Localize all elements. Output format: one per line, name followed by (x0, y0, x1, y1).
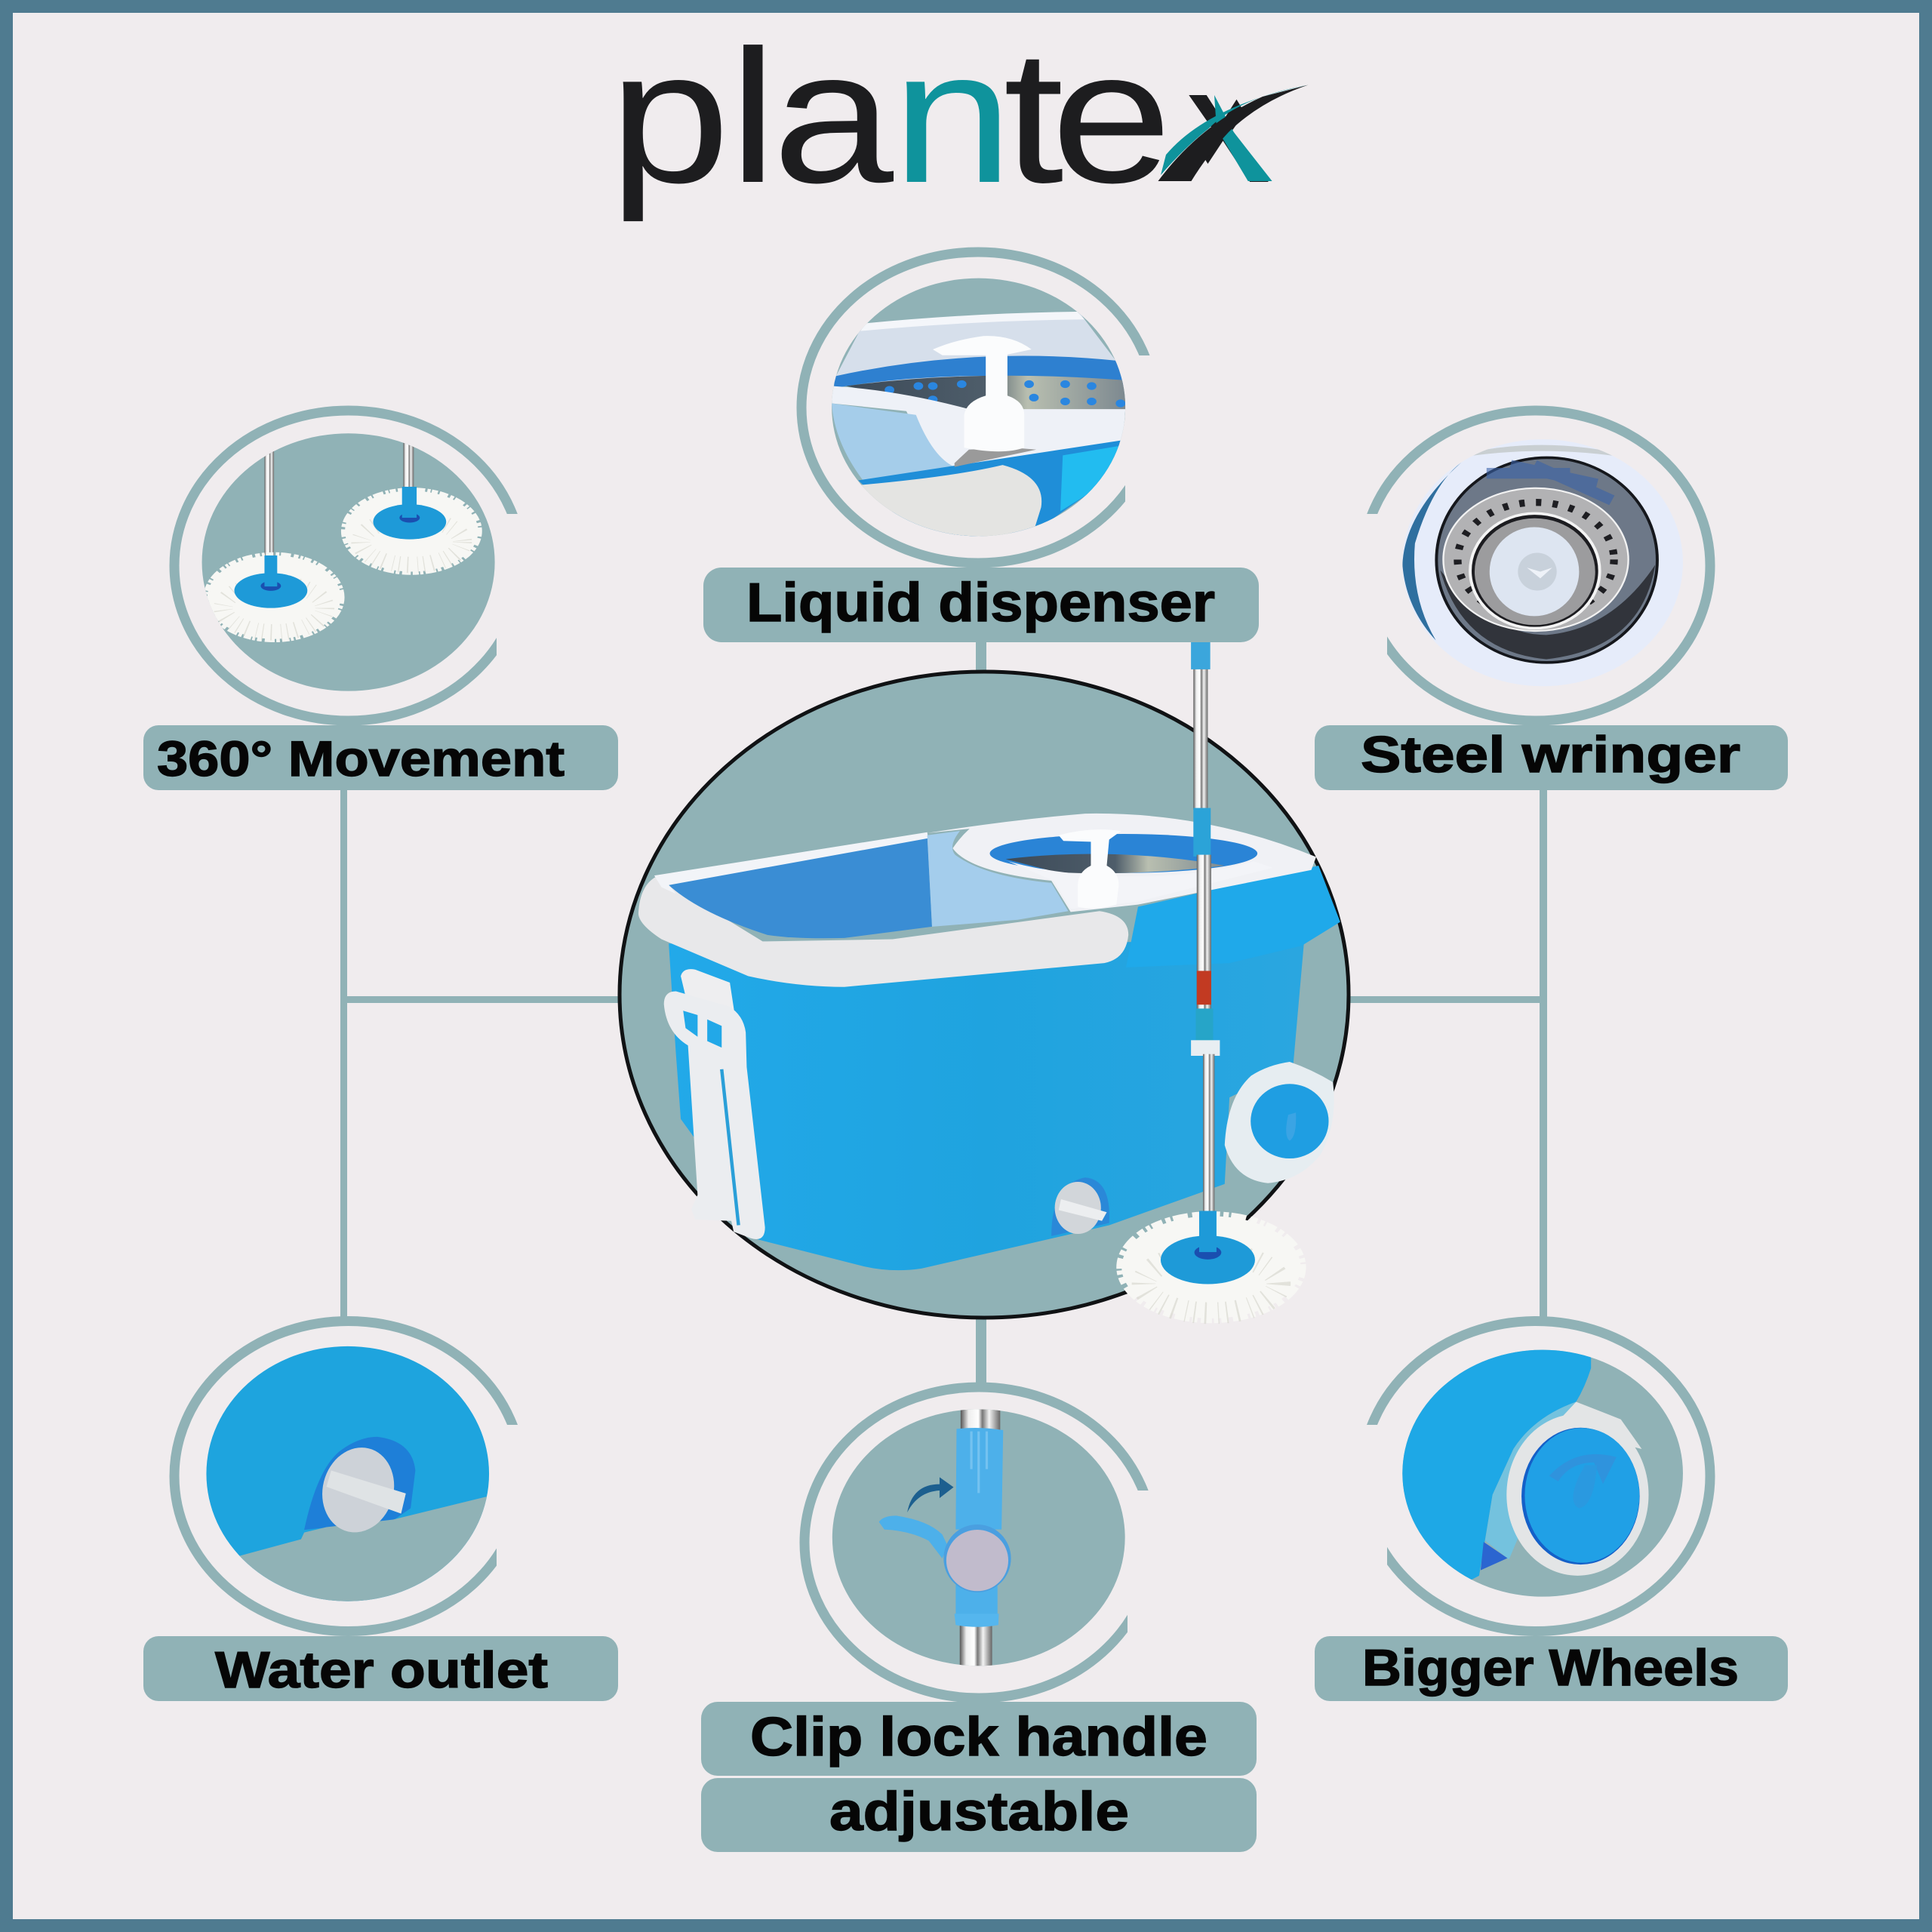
steel basket (1006, 854, 1225, 873)
ring: 360 movement (174, 411, 522, 721)
drain disc (1055, 1182, 1101, 1234)
white rim back edge (654, 832, 928, 894)
bucket inner well (669, 834, 932, 938)
picture: steel wringer (1397, 435, 1690, 691)
connector lines (340, 641, 1547, 1384)
main circle (620, 672, 1349, 1318)
handle groove (721, 1069, 739, 1225)
label: bigger wheels (1315, 1636, 1788, 1701)
logo: plantex (623, 45, 1309, 222)
fold handle (664, 991, 765, 1239)
mop head (1121, 1211, 1301, 1318)
drain lever (1059, 1199, 1107, 1221)
label: clip lock handle: Clip lock handle (750, 1707, 1208, 1767)
bucket body (669, 941, 1304, 1270)
ring: liquid dispenser (801, 252, 1155, 563)
label: steel wringer: Steel wringer (1361, 726, 1740, 783)
red marker band (1197, 971, 1211, 1004)
picture: water outlet (199, 1341, 498, 1608)
label: bigger wheels: Bigger Wheels (1362, 1639, 1739, 1697)
mop pole lower (1203, 1054, 1214, 1212)
pole top cap (1191, 641, 1211, 669)
liquid pump (1059, 829, 1121, 909)
wringer lip (1008, 861, 1273, 909)
picture: liquid dispenser (832, 278, 1126, 536)
pole collar (1193, 808, 1211, 857)
wheel logo mark (1286, 1112, 1296, 1141)
picture: 360 movement mops (196, 430, 501, 694)
white rim front band (638, 876, 1128, 987)
wheel cap (1251, 1084, 1329, 1158)
clip lock (1195, 1008, 1213, 1043)
mop pole upper (1193, 641, 1208, 810)
picture: clip lock handle (829, 1406, 1128, 1670)
label: adjustable (701, 1778, 1257, 1852)
label: water outlet (143, 1636, 618, 1701)
logo: plantex: x (1176, 11, 1271, 223)
logo: plantex: plante (609, 11, 1172, 223)
label: 360 movement: 360° Movement (157, 731, 565, 786)
label: clip lock handle (701, 1702, 1257, 1776)
clip band (1191, 1040, 1220, 1056)
back strap bracket (681, 969, 736, 1024)
wringer opening (990, 834, 1257, 873)
label: adjustable: adjustable (829, 1782, 1129, 1842)
ring: steel wringer (1362, 411, 1710, 721)
ring: clip lock handle (804, 1387, 1153, 1698)
label: liquid dispenser (703, 568, 1259, 642)
main product: spin mop bucket (638, 641, 1340, 1318)
divider slope (928, 831, 1068, 927)
label: water outlet: Water outlet (215, 1641, 548, 1699)
picture: bigger wheels (1397, 1346, 1690, 1600)
label: liquid dispenser: Liquid dispenser (746, 573, 1215, 633)
ring: water outlet (174, 1321, 522, 1632)
wheel housing (1225, 1062, 1334, 1183)
bucket right upper panel (1126, 866, 1340, 968)
ring: bigger wheels (1362, 1321, 1710, 1632)
mop pole middle (1197, 855, 1211, 1011)
label: steel wringer (1315, 725, 1788, 790)
wringer top (928, 814, 1316, 912)
drain opening (1051, 1177, 1109, 1236)
label: 360 movement (143, 725, 618, 790)
